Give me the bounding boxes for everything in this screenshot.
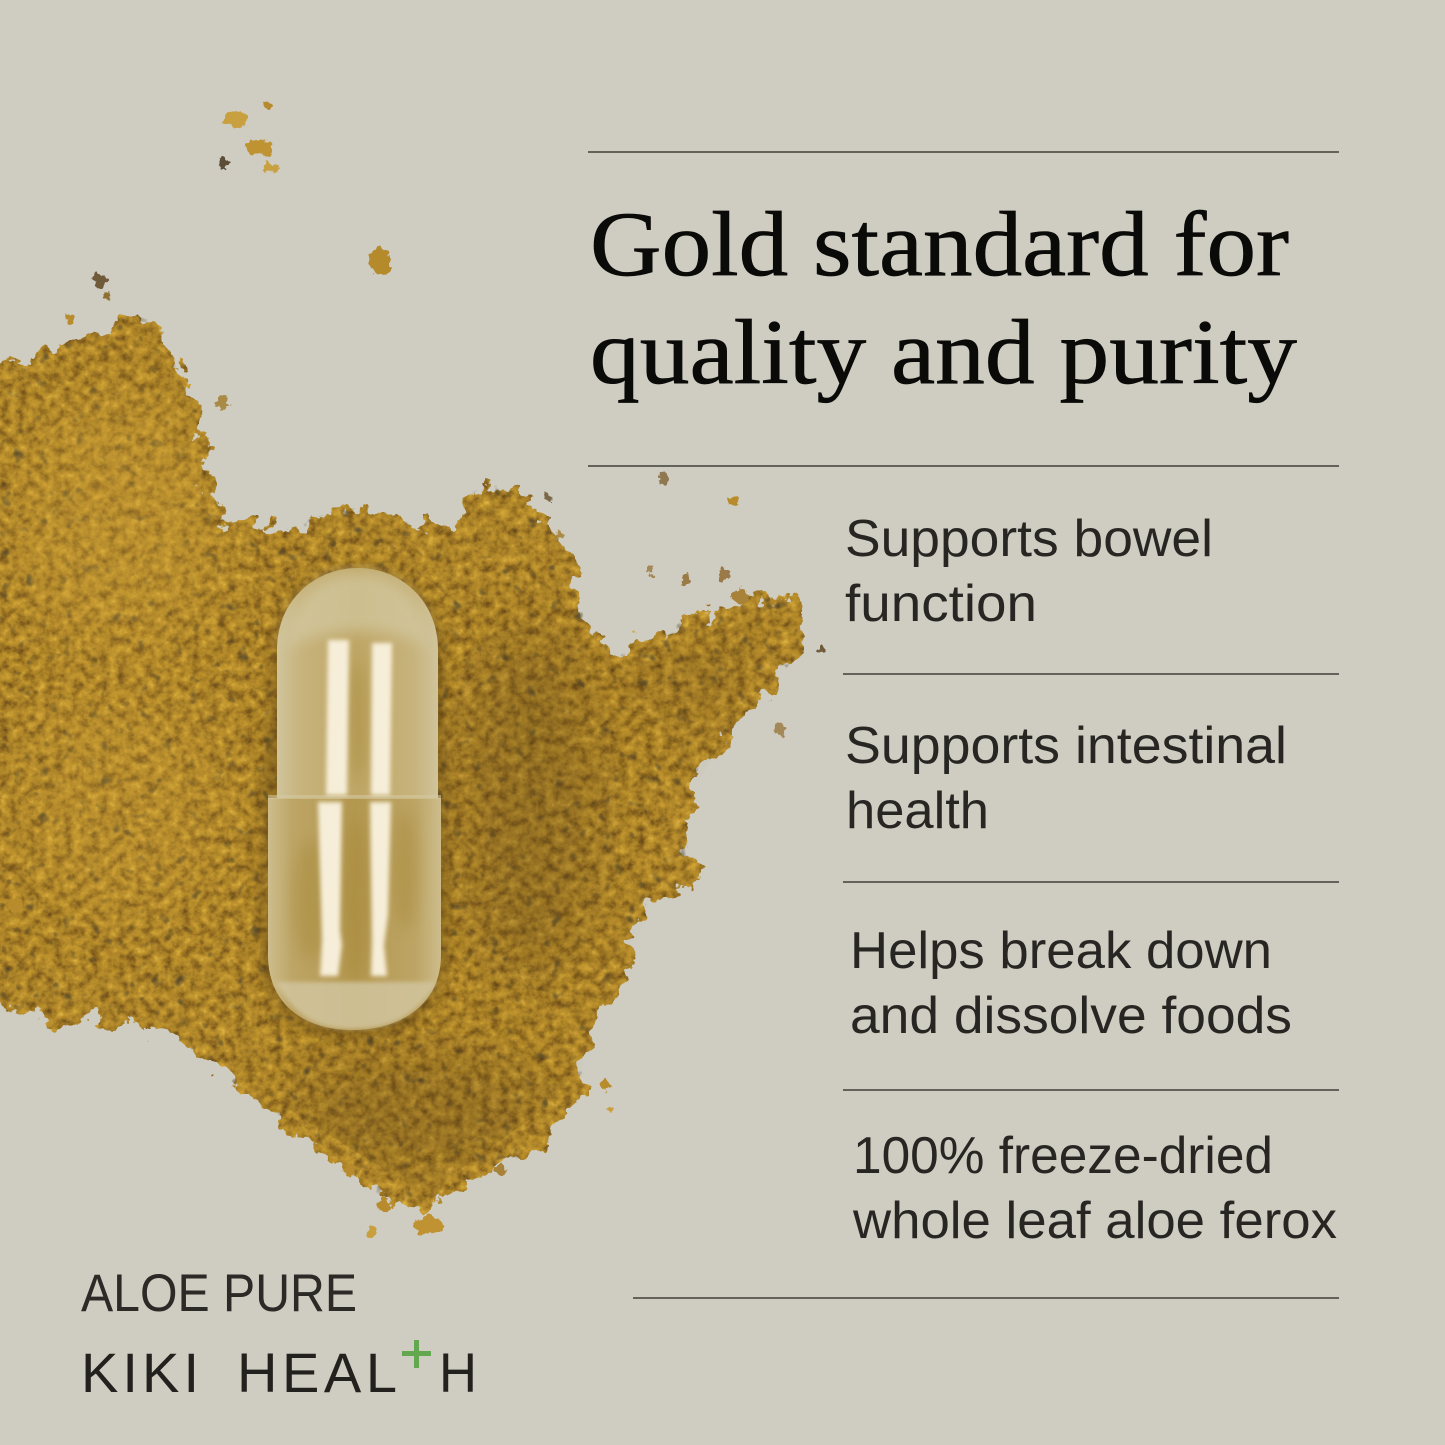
powder pile <box>0 312 806 1210</box>
capsule shadow <box>262 566 446 1038</box>
benefit: intestinal health: health <box>846 782 989 840</box>
capsule highlights <box>318 640 392 976</box>
benefit: bowel function: function <box>845 575 1037 633</box>
capsule seam <box>268 795 441 799</box>
title <box>590 193 1297 403</box>
product name: ALOE PURE <box>81 1264 357 1323</box>
logo: Kiki Health <box>81 1340 477 1404</box>
benefit: freeze-dried aloe <box>852 1127 1337 1250</box>
benefit: breaks down foods <box>850 922 1292 1045</box>
capsule lower body <box>268 798 441 1030</box>
capsule contents tint <box>294 660 417 980</box>
benefit: intestinal health: Supports intestinal <box>845 717 1287 775</box>
logo: Kiki Health: HEAL <box>237 1341 397 1404</box>
title: Gold standard for <box>590 193 1289 295</box>
benefit: freeze-dried aloe: whole leaf aloe ferox <box>852 1192 1337 1250</box>
logo: Kiki Health: H <box>439 1341 477 1404</box>
title: quality and purity <box>590 301 1297 403</box>
benefit: breaks down foods: and dissolve foods <box>850 987 1292 1045</box>
rule lines <box>588 152 1339 1298</box>
benefit: bowel function: Supports bowel <box>845 510 1213 568</box>
benefit: freeze-dried aloe: 100% freeze-dried <box>853 1127 1273 1185</box>
scattered powder crumbs <box>8 101 826 1236</box>
powder tonal shading <box>10 390 770 1170</box>
capsule <box>262 566 446 1038</box>
logo: Kiki Health: KIKI <box>81 1341 199 1404</box>
logo plus mark <box>402 1340 431 1368</box>
capsule top glow <box>285 572 430 650</box>
capsule upper body <box>277 568 438 798</box>
benefit: intestinal health <box>845 717 1287 840</box>
benefit: bowel function <box>845 510 1213 633</box>
benefit: breaks down foods: Helps break down <box>850 922 1272 980</box>
capsule end tint <box>274 982 437 1029</box>
